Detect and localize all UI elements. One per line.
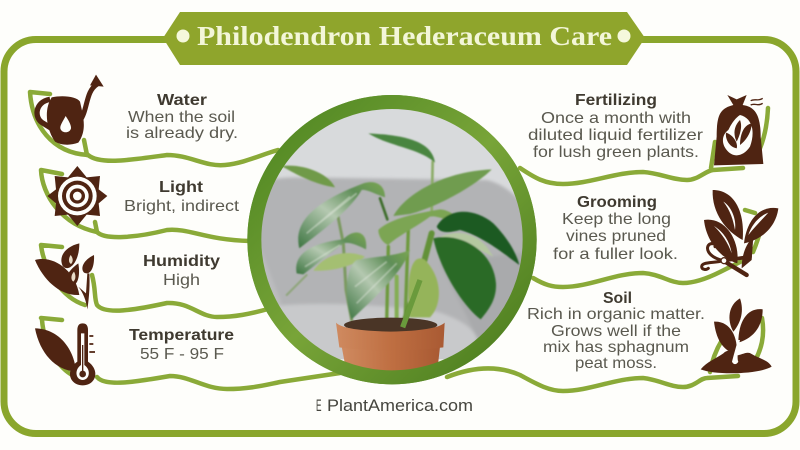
text: grooming: vines pruned — [566, 228, 666, 245]
text: water: is already dry. — [126, 125, 238, 142]
source credit: E — [316, 396, 322, 415]
text: grooming: Keep the long — [562, 211, 671, 228]
text: humidity — [143, 253, 220, 289]
vines and leaf outlines — [30, 92, 768, 391]
photo in circular ring — [240, 90, 540, 390]
text: humidity: Humidity — [143, 253, 220, 270]
text: soil: Soil — [603, 290, 632, 307]
icon: watering can — [37, 75, 104, 145]
text: humidity: High — [163, 272, 200, 289]
leaves — [408, 258, 439, 317]
text: water — [126, 92, 238, 142]
text: fertilizing: for lush green plants. — [533, 144, 699, 161]
text: light: Bright, indirect — [124, 198, 240, 215]
pot — [342, 348, 440, 370]
text: soil: Rich in organic matter. — [527, 306, 705, 323]
text: soil: Grows well if the — [551, 323, 681, 340]
source credit: PlantAmerica.com — [327, 396, 473, 415]
icon: thermometer with leaf — [35, 323, 95, 385]
text: temperature: 55 F - 95 F — [140, 346, 224, 363]
text: fertilizing: Fertilizing — [575, 92, 657, 109]
text: light — [124, 179, 240, 215]
stems — [287, 162, 433, 327]
text: fertilizing: Once a month with — [541, 110, 691, 127]
title banner — [163, 12, 645, 65]
text: soil: mix has sphagnum — [543, 339, 689, 356]
text: grooming: Grooming — [577, 194, 657, 211]
sofa — [261, 176, 523, 360]
text: soil: peat moss. — [575, 355, 657, 372]
icon: sprout in soil — [701, 298, 772, 373]
text: temperature — [129, 327, 234, 363]
icon: humidity leaves — [35, 243, 94, 309]
text: fertilizing — [528, 92, 704, 161]
ring — [254, 102, 530, 377]
icon: pruning shears — [702, 244, 750, 275]
title banner: Philodendron Hederaceum Care — [197, 21, 612, 51]
text: water: When the soil — [128, 109, 235, 126]
text: light: Light — [159, 179, 204, 196]
icon: leaves — [704, 190, 778, 268]
soil — [344, 318, 437, 332]
text: soil — [527, 290, 705, 372]
text: grooming: for a fuller look. — [553, 246, 678, 263]
text: water: Water — [157, 92, 207, 109]
wall — [275, 109, 516, 201]
icon: fertilizer bag — [714, 95, 763, 165]
text: fertilizing: diluted liquid fertilizer — [528, 127, 704, 144]
icon: sun — [47, 166, 107, 226]
text: temperature: Temperature — [129, 327, 234, 344]
text: grooming — [553, 194, 678, 263]
leaf stripes — [305, 193, 397, 303]
